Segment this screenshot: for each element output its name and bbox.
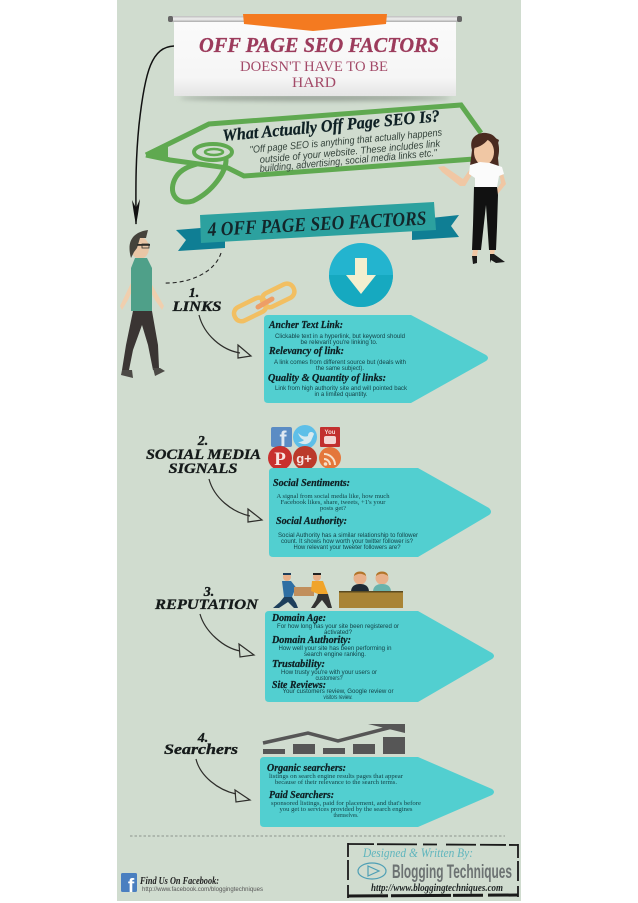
panel: Ancher Text Link: xyxy=(268,320,343,331)
panel: in a limited quantity. xyxy=(314,391,368,398)
panel: listings on search engine results pages that appear xyxy=(269,773,404,780)
footer: facebook: http://www.facebook.com/bloggingtechniques xyxy=(142,887,263,893)
panel: How relevant your tweeter followers are? xyxy=(294,544,401,551)
panel: A link comes from different source but (deals with xyxy=(274,359,407,366)
social icons: f xyxy=(280,428,288,451)
signature stamp xyxy=(348,843,518,898)
icon: chain link xyxy=(232,281,297,324)
heading xyxy=(154,585,259,613)
panel xyxy=(260,757,494,827)
title banner: OFF PAGE SEO FACTORS xyxy=(199,33,439,57)
social icons: P xyxy=(274,449,286,470)
heading: 3. xyxy=(203,585,214,600)
social icons: g+ xyxy=(296,451,312,466)
panel: Facebook likes, share, tweets, +1's your xyxy=(280,499,386,506)
panel: Relevancy of link: xyxy=(268,346,344,357)
heading: 2. xyxy=(197,434,208,449)
character: man xyxy=(120,230,165,378)
footer: facebook xyxy=(121,873,263,897)
heading: Searchers xyxy=(164,742,238,758)
section 4: searchers xyxy=(164,724,494,827)
panel: Social Authority has a similar relationship to follower xyxy=(278,532,418,539)
arrow xyxy=(196,759,250,802)
title banner xyxy=(168,14,462,101)
heading: REPUTATION xyxy=(154,597,259,613)
heading: 1. xyxy=(189,286,199,301)
panel: the same subject). xyxy=(316,365,364,372)
heading xyxy=(146,434,261,477)
tag heading: What Actually Off Page SEO Is? xyxy=(222,106,440,145)
icon: facebook xyxy=(121,873,137,897)
icon: down arrow circle xyxy=(329,243,393,307)
heading: 4. xyxy=(197,731,208,746)
panel: Paid Searchers: xyxy=(269,790,334,801)
panel: activated? xyxy=(324,629,353,636)
heading: LINKS xyxy=(171,299,222,315)
panel: because of their relevance to the search terms. xyxy=(275,779,397,786)
ribbon heading: 4 OFF PAGE SEO FACTORS xyxy=(206,208,427,241)
arrow xyxy=(209,479,262,522)
tag quote: "Off page SEO is anything that actually happens xyxy=(249,128,442,156)
panel: visitors review. xyxy=(324,694,353,701)
section 2: social media signals xyxy=(146,425,491,557)
arrow: title to character xyxy=(132,46,174,225)
social icons: You xyxy=(325,430,336,436)
panel: themselves. xyxy=(334,812,359,819)
tag quote: outside of your website. These includes link xyxy=(259,139,441,166)
green tag callout xyxy=(146,105,481,202)
dashed connector xyxy=(163,253,221,283)
panel: How well your site has been performing in xyxy=(278,645,392,652)
heading xyxy=(164,731,238,758)
panel: Your customers review, Google review or xyxy=(282,688,394,695)
background panel xyxy=(117,0,521,901)
tag quote xyxy=(249,128,442,175)
panel: Quality & Quantity of links: xyxy=(268,373,386,384)
panel xyxy=(264,315,488,403)
panel: sponsored listings, paid for placement, and that's before xyxy=(271,800,421,807)
section 3: reputation xyxy=(154,572,494,702)
icon: growth chart xyxy=(263,724,405,754)
title banner: DOESN'T HAVE TO BE xyxy=(240,59,388,75)
panel: For how long has your site been registered or xyxy=(277,623,399,630)
tag string xyxy=(172,144,232,202)
title banner: HARD xyxy=(292,75,336,91)
signature stamp: Designed & Written By: xyxy=(362,845,473,860)
icon: play button xyxy=(358,863,386,879)
arrow xyxy=(199,315,251,358)
icon: handshake people xyxy=(273,573,335,608)
panel xyxy=(269,468,491,557)
panel: How trusty you're with your users or xyxy=(281,669,377,676)
panel: Clickable text in a hyperlink, but keyword should xyxy=(275,333,406,340)
character: woman xyxy=(438,133,506,264)
panel: Domain Authority: xyxy=(271,635,351,646)
footer: facebook: Find Us On Facebook: xyxy=(139,876,219,887)
panel: Domain Age: xyxy=(271,613,326,624)
arrow xyxy=(200,614,254,657)
icon: reviewers at desk xyxy=(339,572,403,608)
panel: Link from high authority site and will pointed back xyxy=(275,385,408,392)
panel: count. It shows how worth your twitter follower is? xyxy=(281,538,414,545)
panel: be relevant you're linking to. xyxy=(300,339,378,346)
panel: Site Reviews: xyxy=(272,680,326,691)
panel: posts get? xyxy=(320,505,346,512)
heading: SIGNALS xyxy=(168,461,238,477)
icon: facebook: f xyxy=(128,876,135,897)
panel: you get to services provided by the search engines xyxy=(280,806,413,813)
signature stamp: http://www.bloggingtechniques.com xyxy=(371,883,503,894)
panel: Social Sentiments: xyxy=(273,478,350,489)
panel xyxy=(265,611,494,702)
heading xyxy=(171,286,222,315)
panel: Organic searchers: xyxy=(267,763,346,774)
heading: SOCIAL MEDIA xyxy=(146,447,261,463)
panel: A signal from social media like, how much xyxy=(276,493,390,500)
panel: customers? xyxy=(316,675,343,682)
panel: Social Authority: xyxy=(276,516,347,527)
signature stamp: Blogging Techniques xyxy=(392,862,512,883)
panel: Trustability: xyxy=(272,659,325,670)
social icons xyxy=(268,425,341,470)
tag quote: building, advertising, social media links etc." xyxy=(259,148,438,175)
ribbon heading xyxy=(176,202,459,251)
section 1: links xyxy=(171,281,488,403)
panel: search engine ranking. xyxy=(304,651,366,658)
